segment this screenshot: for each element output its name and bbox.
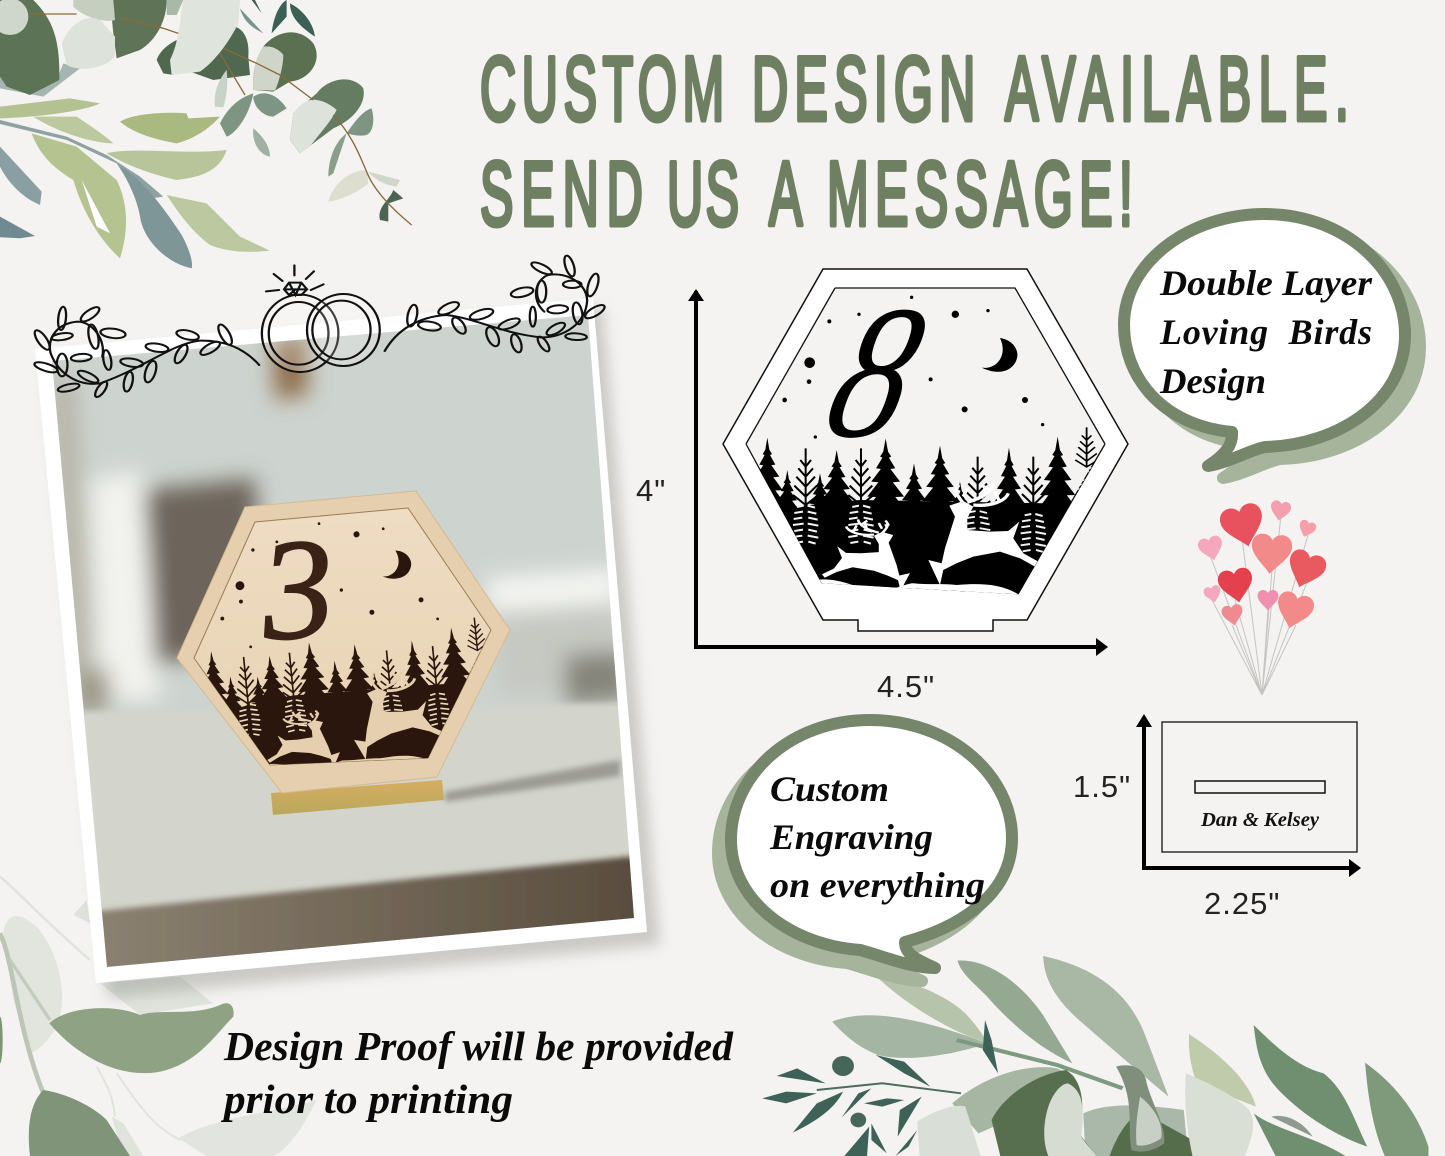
text: design proof note: Design Proof will be provided [223,1023,733,1069]
title: SEND [480,143,643,245]
label: height: 4" [636,473,666,508]
chart: name plaque dimension drawing: Dan & Kelsey [1200,809,1319,831]
callout: custom engraving: on everything [770,865,985,905]
title: A [769,143,802,245]
title: US [667,143,739,245]
foliage: bottom right [762,956,1428,1156]
text: design proof note: prior to printing [221,1076,513,1122]
label: width: 4.5" [877,669,935,704]
title: DESIGN [752,38,975,140]
callout: double layer: Design [1159,361,1266,401]
callout: double layer [1124,214,1420,478]
title: CUSTOM [480,38,724,140]
callout: custom engraving: Custom [770,769,889,809]
icon: wedding rings and laurel garland [32,255,607,398]
numeral 3: 3 [256,508,339,671]
callout: double layer: Double Layer [1159,263,1373,303]
chart: hexagon dimension drawing [636,268,1128,704]
text: design proof note [221,1023,733,1122]
label: plaque height: 1.5" [1073,769,1131,804]
callout: double layer: Loving Birds [1159,312,1372,352]
chart: name plaque dimension drawing [1073,714,1361,921]
foliage: top left [0,0,412,268]
title: MESSAGE! [827,143,1133,245]
label: plaque width: 2.25" [1204,886,1280,921]
icon: heart balloons [1197,500,1329,695]
title [480,38,1349,245]
callout: custom engraving: Engraving [769,817,933,857]
callout: custom engraving [718,720,1012,981]
title: AVAILABLE. [1005,38,1349,140]
wooden hexagon sign [177,491,510,815]
foliage: bottom left [0,877,317,1156]
panel: photo of wooden table number [0,298,700,1000]
numeral 8: 8 [808,268,944,478]
